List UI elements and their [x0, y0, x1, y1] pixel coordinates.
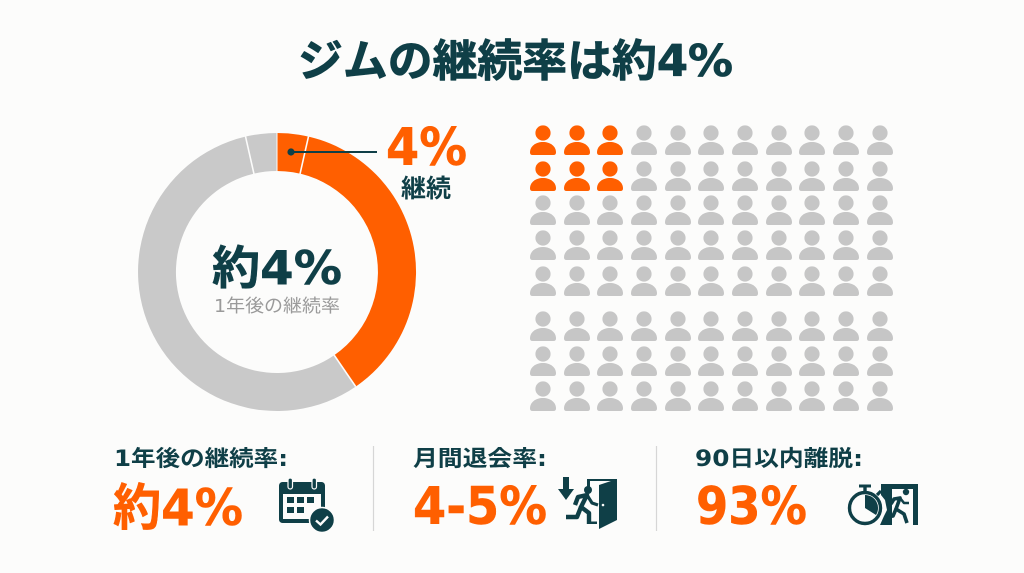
title: ジムの継続率は約4% — [298, 36, 733, 87]
exit door — [880, 484, 918, 525]
donut center value: 約4% — [212, 241, 342, 295]
callout label: 継続 — [401, 174, 451, 203]
orange people — [530, 125, 623, 191]
callout: 4% continuing — [287, 118, 467, 203]
stat: 90-day dropout — [695, 447, 918, 537]
gray people — [530, 125, 893, 411]
stat value: 4-5% — [413, 477, 547, 537]
door — [587, 479, 617, 529]
stat label: 月間退会率: — [413, 447, 547, 472]
down arrow — [558, 477, 574, 500]
running figure — [566, 495, 598, 524]
donut segment: remaining gray — [138, 133, 356, 411]
callout value: 4% — [386, 118, 467, 178]
stat value: 93% — [696, 477, 807, 537]
donut center caption: 1年後の継続率 — [214, 296, 340, 317]
leader line — [287, 148, 377, 156]
stat label: 90日以内離脱: — [695, 447, 863, 472]
icon: exit door with arrow — [558, 477, 617, 529]
icon: calendar with check — [279, 478, 334, 532]
donut chart — [138, 133, 416, 411]
icon: stopwatch and exit — [850, 484, 918, 525]
donut segment: orange — [277, 133, 416, 387]
stat: 1-year retention — [113, 447, 334, 537]
stat label: 1年後の継続率: — [114, 447, 288, 472]
pictogram grid: people — [530, 125, 893, 411]
stopwatch — [850, 484, 881, 524]
stat: monthly cancellation — [413, 447, 617, 537]
donut separators — [245, 133, 356, 387]
stat value: 約4% — [113, 479, 243, 537]
